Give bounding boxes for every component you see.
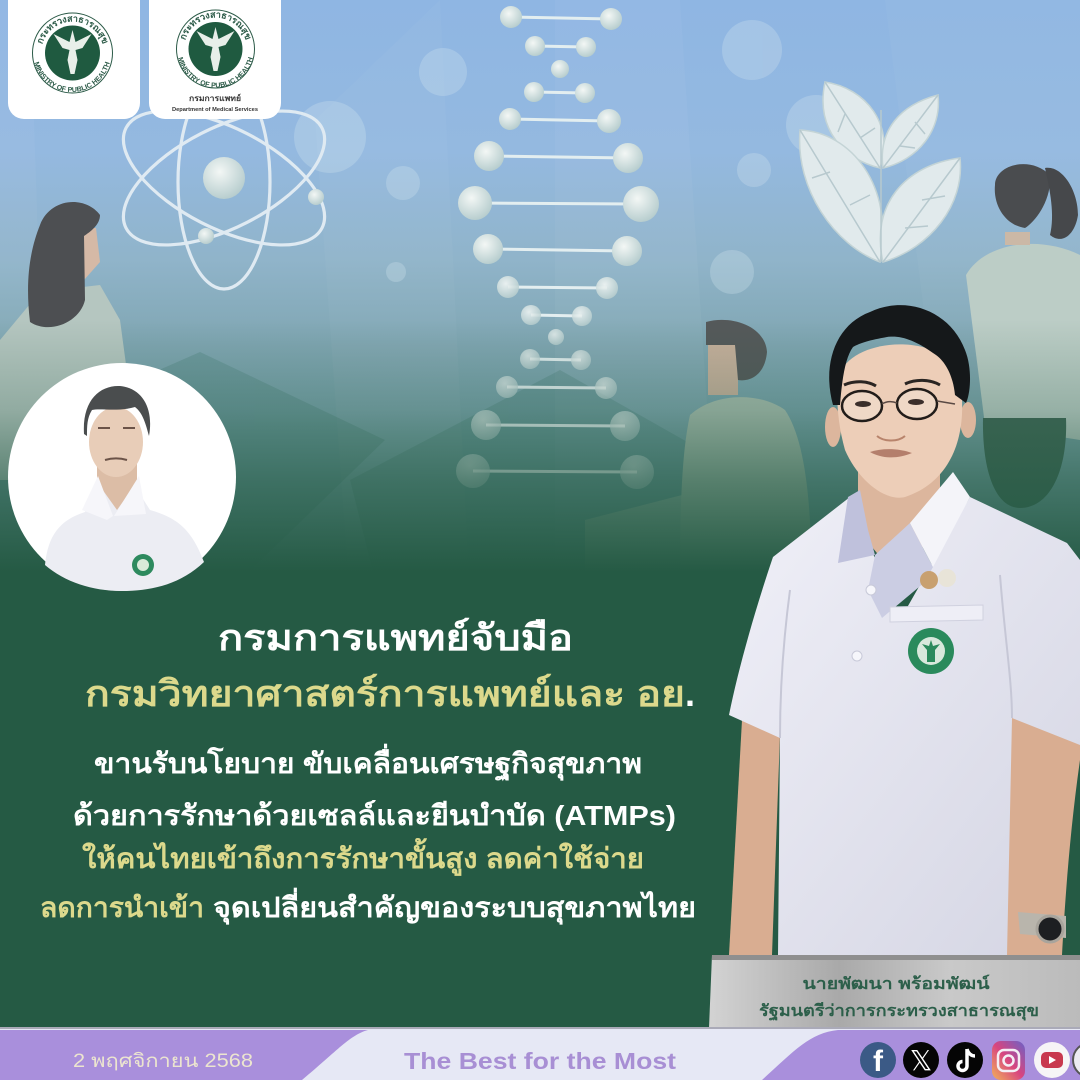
icon: TikTok xyxy=(947,1042,983,1078)
body text xyxy=(40,743,696,925)
footer purple left band xyxy=(0,1030,368,1080)
minister head xyxy=(825,305,976,498)
minister shirt pocket xyxy=(890,605,983,622)
emblem: Ministry of Public Health xyxy=(32,12,113,94)
icon: Instagram xyxy=(992,1041,1025,1080)
emblem: Department of Medical Services: MINISTRY OF PUBLIC HEALTH xyxy=(178,57,253,88)
icon: facebook: f xyxy=(873,1045,884,1078)
emblem: Department of Medical Services xyxy=(176,10,255,88)
background bubbles xyxy=(294,20,846,294)
solid green lower panel xyxy=(0,571,1080,1031)
logo card: Department of Medical Services: Department of Medical Services xyxy=(172,107,258,113)
minister watch xyxy=(1018,912,1066,942)
logo card: Department of Medical Services xyxy=(149,0,281,119)
footer slogan: The Best for the Most xyxy=(404,1048,676,1074)
name plate xyxy=(709,955,1080,1028)
body text: ด้วยการรักษาด้วยเซลล์และยีนบำบัด (ATMPs) xyxy=(73,800,676,831)
background figure: woman on the right xyxy=(966,164,1080,508)
background light panels xyxy=(0,0,1080,600)
emblem: Ministry of Public Health: กระทรวงสาธารณสุข xyxy=(38,16,108,44)
minister shirt collar xyxy=(838,472,970,618)
footer date: 2 พฤศจิกายน 2568 xyxy=(73,1051,253,1072)
icon: X: 𝕏 xyxy=(910,1045,932,1076)
icon: facebook xyxy=(860,1042,896,1078)
green fade overlay xyxy=(0,320,1080,572)
atom illustration xyxy=(103,75,345,289)
background figure: man in the middle xyxy=(585,320,812,600)
minister shirt emblem xyxy=(908,628,954,674)
footer purple right band xyxy=(762,1030,1080,1080)
logo card: Department of Medical Services: กรมการแพทย์ xyxy=(189,93,241,103)
minister lapel pins xyxy=(920,569,956,589)
circular portrait of director xyxy=(8,363,236,591)
emblem: Ministry of Public Health: MINISTRY OF PUBLIC HEALTH xyxy=(34,62,110,92)
title: กรมวิทยาศาสตร์การแพทย์และ อย xyxy=(85,673,685,714)
background dark stairs shape xyxy=(0,352,790,600)
body text: ขานรับนโยบาย ขับเคลื่อนเศรษฐกิจสุขภาพ xyxy=(94,743,642,782)
icon: extra partial channel xyxy=(1073,1043,1080,1077)
minister sleeve seams xyxy=(780,575,1012,738)
minister neck xyxy=(858,465,940,575)
minister shirt xyxy=(729,497,1080,955)
minister portrait xyxy=(729,305,1080,955)
footer bar xyxy=(0,1027,1080,1080)
minister shirt buttons xyxy=(852,585,876,661)
plant leaf illustration xyxy=(800,82,960,262)
body text: จุดเปลี่ยนสำคัญของระบบสุขภาพไทย xyxy=(213,887,696,925)
body text: ลดการนำเข้า xyxy=(40,892,204,923)
icon: X xyxy=(903,1042,939,1078)
emblem: Department of Medical Services: กระทรวงสาธารณสุข xyxy=(181,12,251,40)
title: กรมการแพทย์จับมือ xyxy=(218,617,573,658)
DNA helix illustration xyxy=(456,6,659,489)
minister arms xyxy=(729,715,1080,955)
background figure: woman on the left xyxy=(0,202,127,480)
logo card: Ministry of Public Health xyxy=(8,0,140,119)
icon: YouTube xyxy=(1034,1042,1070,1078)
body text: ให้คนไทยเข้าถึงการรักษาขั้นสูง ลดค่าใช้จ่าย xyxy=(82,837,644,876)
title xyxy=(85,617,695,714)
name plate: รัฐมนตรีว่าการกระทรวงสาธารณสุข xyxy=(759,1001,1039,1021)
title: . xyxy=(685,673,695,714)
social icons xyxy=(860,1041,1080,1080)
name plate: นายพัฒนา พร้อมพัฒน์ xyxy=(802,974,990,993)
